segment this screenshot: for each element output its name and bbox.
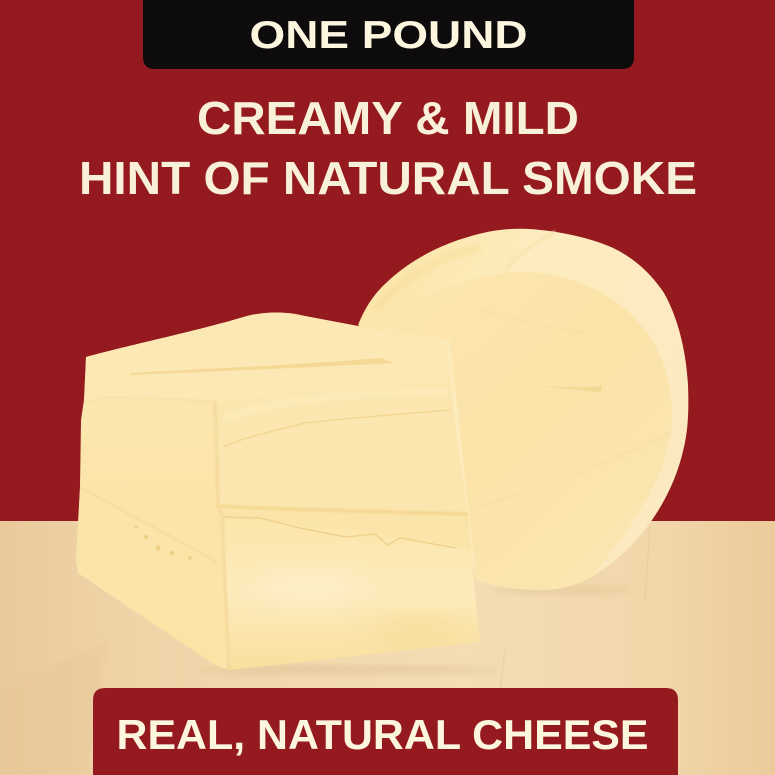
- torn edge: [223, 517, 456, 548]
- wooden table: [0, 521, 775, 775]
- upper tear: [223, 410, 450, 447]
- crease between halves: [217, 506, 468, 514]
- vertical corner edge: [215, 402, 229, 670]
- top banner: one pound: ONE POUND: [250, 14, 528, 57]
- top banner: one pound: [143, 0, 634, 69]
- bottom banner: real natural cheese: REAL, NATURAL CHEESE: [116, 711, 648, 758]
- round piece: cut face: [360, 272, 672, 590]
- top slit: [130, 358, 395, 375]
- heading: flavor description: HINT OF NATURAL SMOKE: [79, 152, 697, 204]
- heading: flavor description: [79, 92, 697, 204]
- cube: top face: [84, 312, 451, 402]
- cheese pits: [134, 525, 192, 560]
- cheese: round piece: [358, 229, 688, 590]
- cube: left face: [78, 402, 84, 521]
- cube: front lower face: [226, 548, 478, 670]
- cube: front upper face: [215, 382, 468, 513]
- cheese: cube piece: [76, 312, 480, 670]
- bottom banner: real natural cheese: [93, 688, 678, 775]
- heading: flavor description: CREAMY & MILD: [197, 92, 579, 144]
